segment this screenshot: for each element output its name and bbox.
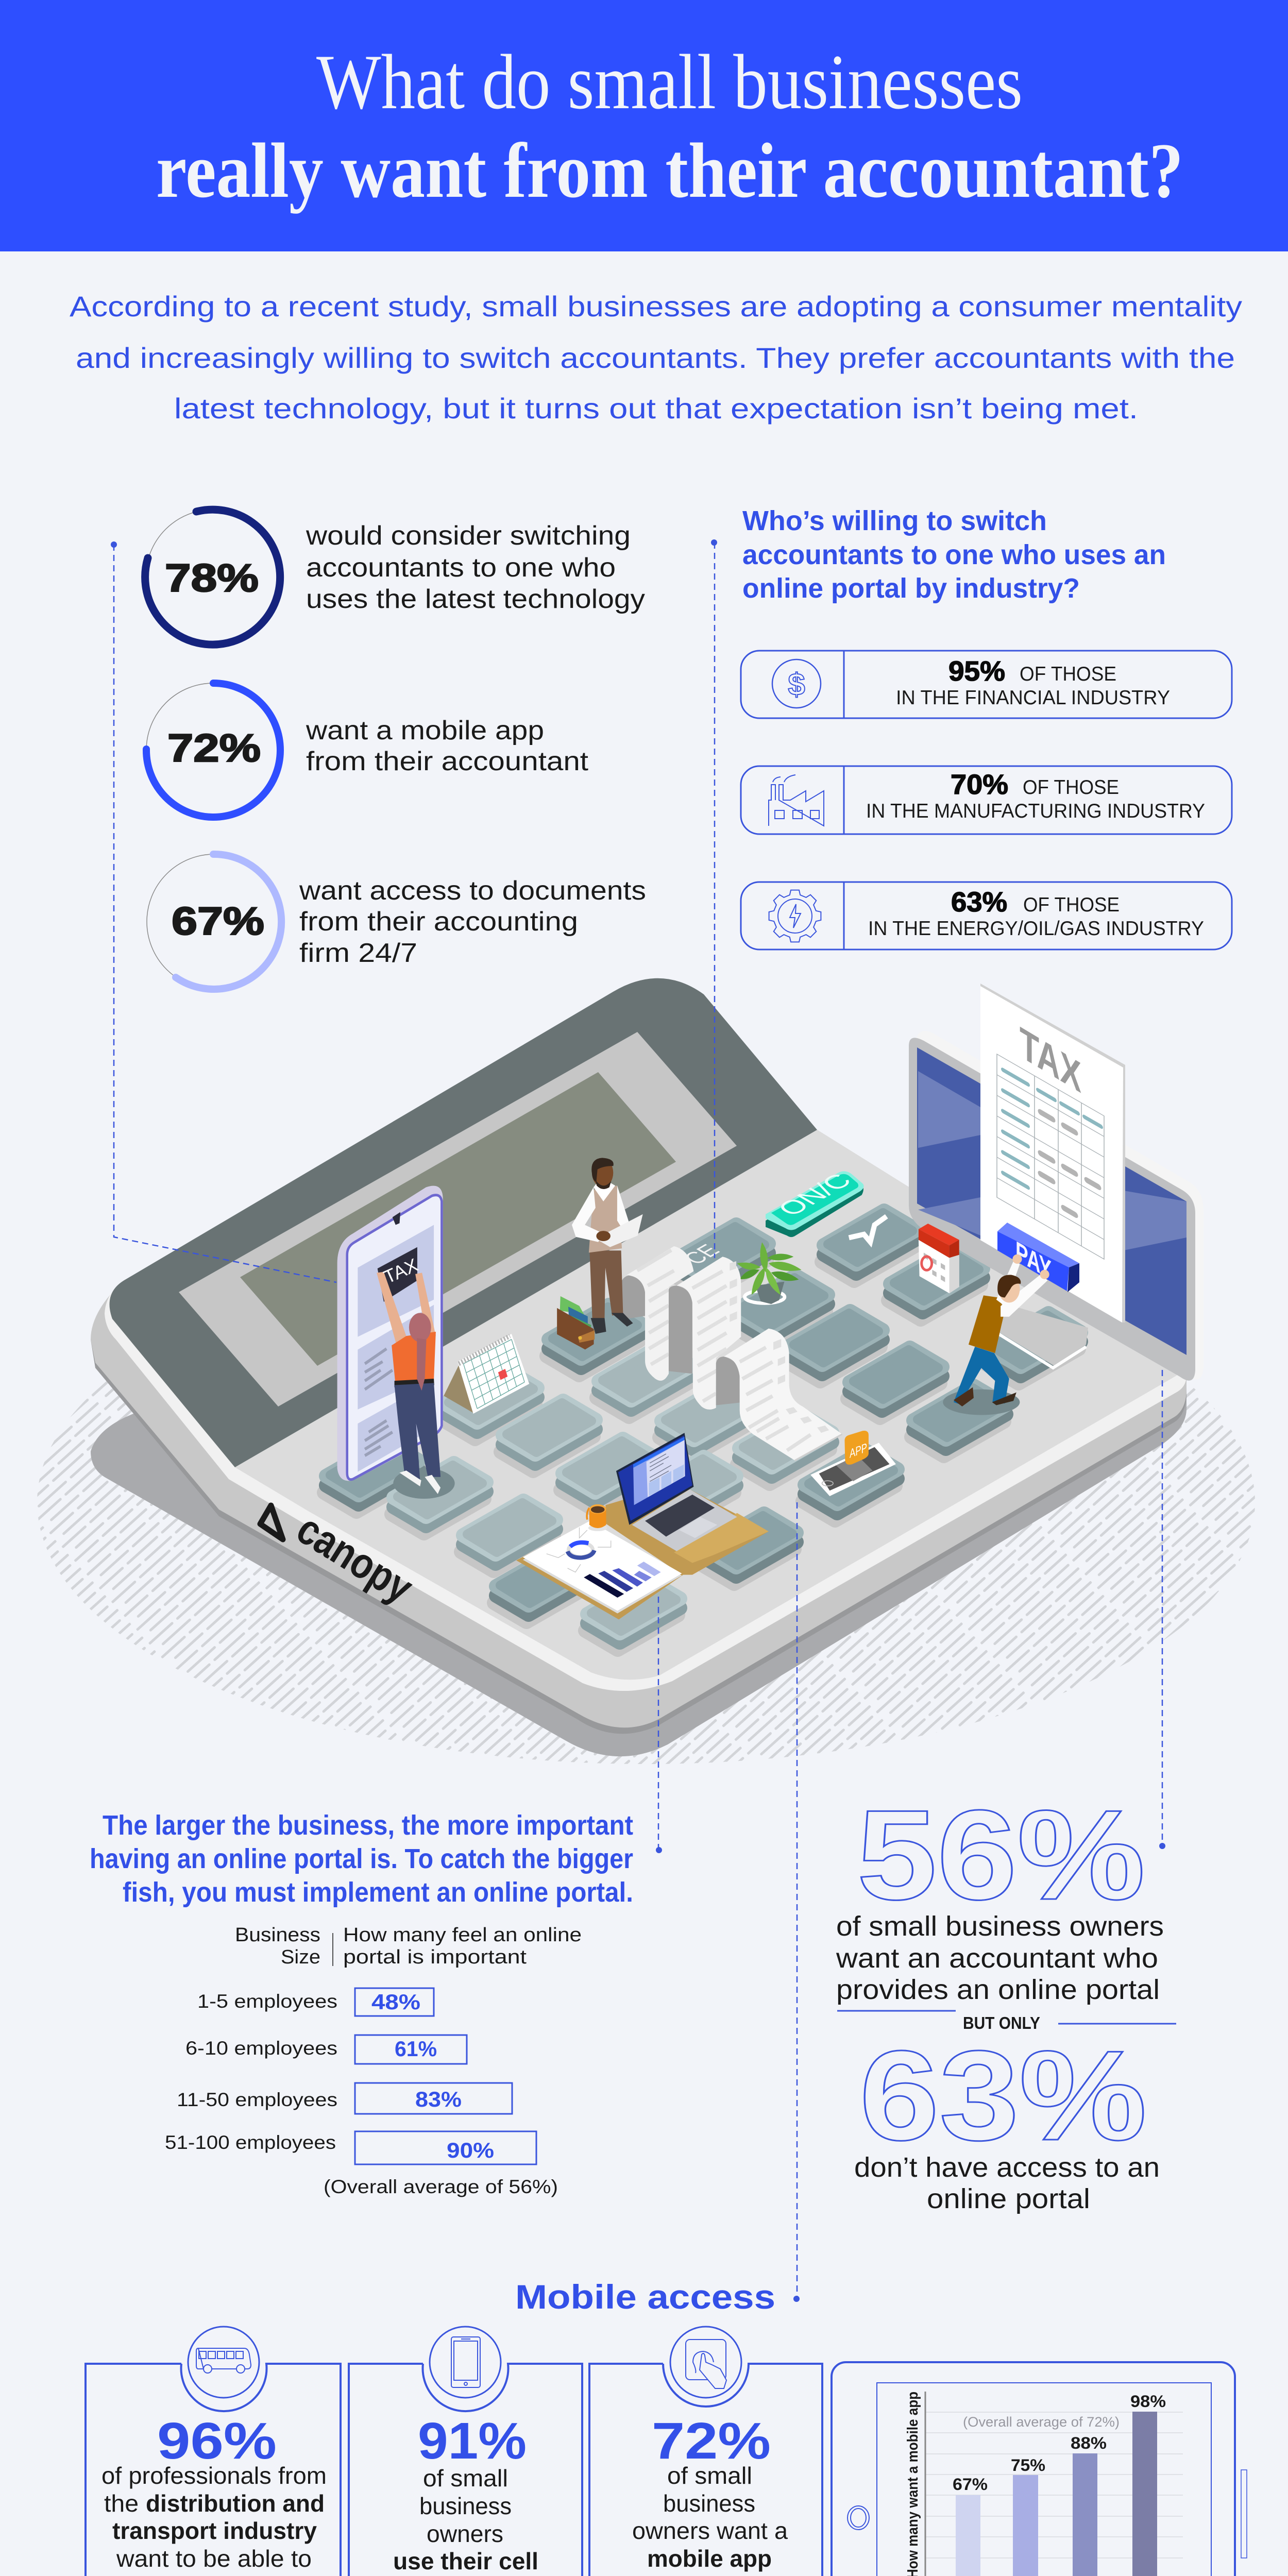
column headers: How many feel an online (343, 1924, 582, 1946)
pay button: PAY (1015, 1235, 1052, 1286)
display surround (179, 1032, 737, 1406)
pay button (997, 1223, 1079, 1292)
text 67%: want access to documents (299, 876, 646, 906)
donut 78%: 78% (165, 556, 259, 600)
energy row: IN THE ENERGY/OIL/GAS INDUSTRY (868, 918, 1204, 940)
card: 91%: of small (423, 2465, 508, 2492)
wallet (557, 1296, 595, 1349)
text 72%: from their accountant (306, 747, 589, 776)
financial row: OF THOSE (1020, 663, 1116, 685)
bar chart: mobile app: 88% (1071, 2434, 1107, 2452)
column headers (235, 1924, 582, 1968)
folder (606, 1489, 769, 1575)
phone screen (347, 1195, 442, 1480)
icon: touch screen (670, 2327, 741, 2398)
card: 96%: 96% (157, 2412, 277, 2470)
header banner (0, 0, 1288, 251)
card: 96%: transport industry (112, 2517, 317, 2544)
56% description: provides an online portal (836, 1974, 1160, 2005)
intro paragraph (70, 290, 1242, 425)
title line 2: really want from their accountant? (156, 127, 1183, 214)
manufacturing row (741, 766, 1232, 834)
dashed connector: first stat to phone (111, 541, 336, 1282)
report on folder (516, 1504, 683, 1619)
bar chart: portal importance: 83% (415, 2087, 462, 2111)
financial row (741, 651, 1232, 718)
card: 91%: use their cell (393, 2548, 538, 2574)
icon: factory (769, 775, 824, 826)
column headers: portal is important (343, 1946, 527, 1968)
monitor frame (909, 1031, 1204, 1380)
tax document (980, 984, 1125, 1323)
card: 91%: business (419, 2493, 512, 2519)
financial row: IN THE FINANCIAL INDUSTRY (896, 687, 1170, 709)
text 78%: uses the latest technology (306, 584, 645, 614)
card: 91% (349, 2327, 582, 2576)
mobile access heading: Mobile access (515, 2278, 775, 2316)
text 67%: from their accounting (299, 907, 578, 937)
63% description: online portal (927, 2183, 1090, 2214)
icon: smartphone (430, 2327, 501, 2398)
donut 67% (147, 854, 282, 989)
card: 72% (589, 2327, 822, 2576)
bar chart: portal importance: 11-50 employees (177, 2089, 337, 2110)
but only divider (837, 2011, 1176, 2032)
canopy logo (260, 1504, 421, 1612)
tablet frame (832, 2362, 1247, 2576)
text 78% (306, 521, 645, 614)
donut 78% (145, 510, 281, 645)
bar chart: portal importance: 1-5 employees (197, 1991, 337, 2012)
card: 72%: 72% (652, 2412, 771, 2470)
bar chart: portal importance: 90% (447, 2138, 494, 2162)
portal heading (90, 1810, 633, 1908)
bar chart: portal importance (165, 1988, 536, 2164)
calculator keys (324, 1211, 1081, 1650)
bar chart: portal importance: 61% (395, 2037, 437, 2061)
card: 91%: 91% (418, 2412, 527, 2470)
bar chart: mobile app: How many want a mobile app (905, 2392, 921, 2576)
donut 72% (146, 683, 280, 817)
monitor with tax form (909, 984, 1204, 1381)
canopy logo: canopy (289, 1504, 421, 1612)
card: 72%: mobile app (647, 2545, 772, 2572)
63% description: don’t have access to an (854, 2152, 1160, 2183)
intro paragraph: According to a recent study, small businesses are adopting a consumer mentality (70, 290, 1242, 323)
industry heading: accountants to one who uses an (742, 539, 1166, 570)
laptop screen (616, 1433, 693, 1525)
tax sign (378, 1247, 417, 1302)
receipt (621, 1246, 842, 1461)
donut 72%: 72% (167, 726, 261, 770)
bar chart: mobile app: 98% (1130, 2392, 1166, 2411)
laptop on folder (606, 1433, 769, 1575)
overall average note: (Overall average of 56%) (324, 2176, 558, 2197)
63% description (854, 2152, 1160, 2214)
key label: CE: CE (678, 1241, 725, 1268)
intro paragraph: and increasingly willing to switch accountants. They prefer accountants with the (76, 342, 1235, 374)
dashed connector: key to mobile access (793, 1502, 800, 2302)
but only divider: BUT ONLY (963, 2013, 1040, 2032)
monitor stand (998, 1302, 1088, 1368)
text 78%: would consider switching (306, 521, 631, 551)
dashed connector: report to bar chart (656, 1597, 662, 1853)
icon: bus (188, 2327, 259, 2398)
56% description: want an accountant who (836, 1943, 1158, 1974)
text 67%: firm 24/7 (299, 938, 417, 968)
bar chart: portal importance: 6-10 employees (185, 2038, 337, 2059)
phone body (337, 1186, 443, 1481)
tax table (997, 1054, 1104, 1259)
column headers: Business (235, 1924, 320, 1946)
phone with app badge (810, 1431, 896, 1496)
desk calendar (444, 1334, 529, 1414)
dashed connector: industry to calculator (711, 539, 717, 1258)
text 67% (299, 876, 646, 968)
small calendar (919, 1224, 959, 1293)
icon: gear with bolt (769, 890, 821, 942)
text 72% (306, 716, 589, 776)
bar chart: mobile app: (Overall average of 72%) (963, 2414, 1120, 2430)
card: 96%: the (104, 2490, 139, 2517)
card: 96% (86, 2327, 341, 2576)
56% description: of small business owners (836, 1911, 1164, 1942)
bar chart: mobile app: 75% (1011, 2456, 1045, 2475)
portal heading: having an online portal is. To catch the bigger (90, 1843, 633, 1874)
man with laptop (572, 1158, 643, 1334)
column headers: Size (281, 1946, 320, 1968)
bar chart: portal importance: 51-100 employees (165, 2132, 336, 2153)
text 72%: want a mobile app (306, 716, 544, 745)
energy row (741, 882, 1232, 950)
tablet with bar chart (832, 2362, 1247, 2576)
card: 96%: want to be able to (116, 2545, 312, 2572)
bar chart: mobile app (905, 2392, 1183, 2576)
portal heading: fish, you must implement an online portal. (123, 1877, 633, 1908)
app badge text: APP (850, 1441, 867, 1461)
card: 72%: owners want a (632, 2517, 788, 2544)
56% description (836, 1911, 1164, 2005)
tax sign text: TAX (381, 1254, 421, 1287)
illustration: hatched ground (37, 1241, 1255, 1764)
panel: technology stats (145, 510, 646, 989)
panel: mobile access (86, 2278, 1247, 2576)
bar chart on report (584, 1562, 661, 1598)
donut chart (568, 1543, 595, 1558)
panel: 56 and 63 percent (836, 1783, 1176, 2214)
dashed connector: monitor to 56% (1159, 1370, 1165, 1849)
card: 96%: distribution and (146, 2490, 325, 2517)
plant (737, 1242, 802, 1304)
panel: online portal by business size (90, 1810, 633, 2197)
card: 96%: of professionals from (101, 2462, 327, 2489)
illustration: calculator body (91, 978, 1187, 1756)
donut 67%: 67% (172, 900, 264, 943)
square-root key symbol (849, 1216, 887, 1242)
portal heading: The larger the business, the more important (103, 1810, 633, 1841)
laptop base (632, 1489, 737, 1551)
manufacturing row: OF THOSE (1023, 776, 1119, 799)
industry heading (742, 505, 1166, 604)
manufacturing row: 70% (951, 769, 1008, 800)
ON/C key (766, 1170, 864, 1237)
panel: industry willingness (741, 505, 1232, 950)
industry heading: online portal by industry? (742, 573, 1080, 604)
monitor screen (917, 1047, 1187, 1355)
display panel (110, 978, 817, 1467)
title line 1: What do small businesses (316, 39, 1023, 125)
tax document: TAX (1020, 1018, 1081, 1103)
big outlined 63%: 63% (859, 2024, 1147, 2167)
phone on the key (337, 1186, 455, 1499)
icon: dollar coin: $ (788, 667, 805, 702)
energy row: 63% (951, 887, 1007, 918)
card: 72%: of small (667, 2462, 752, 2489)
intro paragraph: latest technology, but it turns out that expectation isn’t being met. (174, 392, 1138, 425)
phone panels (358, 1225, 434, 1472)
card: 91%: owners (427, 2520, 503, 2547)
display screen (240, 1072, 676, 1366)
bar chart: portal importance: 48% (371, 1990, 420, 2014)
financial row: 95% (948, 656, 1005, 687)
text 78%: accountants to one who (306, 553, 616, 583)
coffee mug (587, 1504, 607, 1531)
bar chart: mobile app: 67% (953, 2475, 988, 2494)
man pushing pay (943, 1255, 1049, 1415)
ON/C label: ON/C (771, 1170, 859, 1220)
manufacturing row: IN THE MANUFACTURING INDUSTRY (866, 800, 1205, 822)
icon: dollar coin (772, 659, 821, 708)
woman (377, 1272, 455, 1499)
industry heading: Who’s willing to switch (742, 505, 1047, 536)
big outlined 56%: 56% (857, 1783, 1145, 1926)
card: 72%: business (663, 2490, 755, 2517)
energy row: OF THOSE (1023, 894, 1120, 916)
